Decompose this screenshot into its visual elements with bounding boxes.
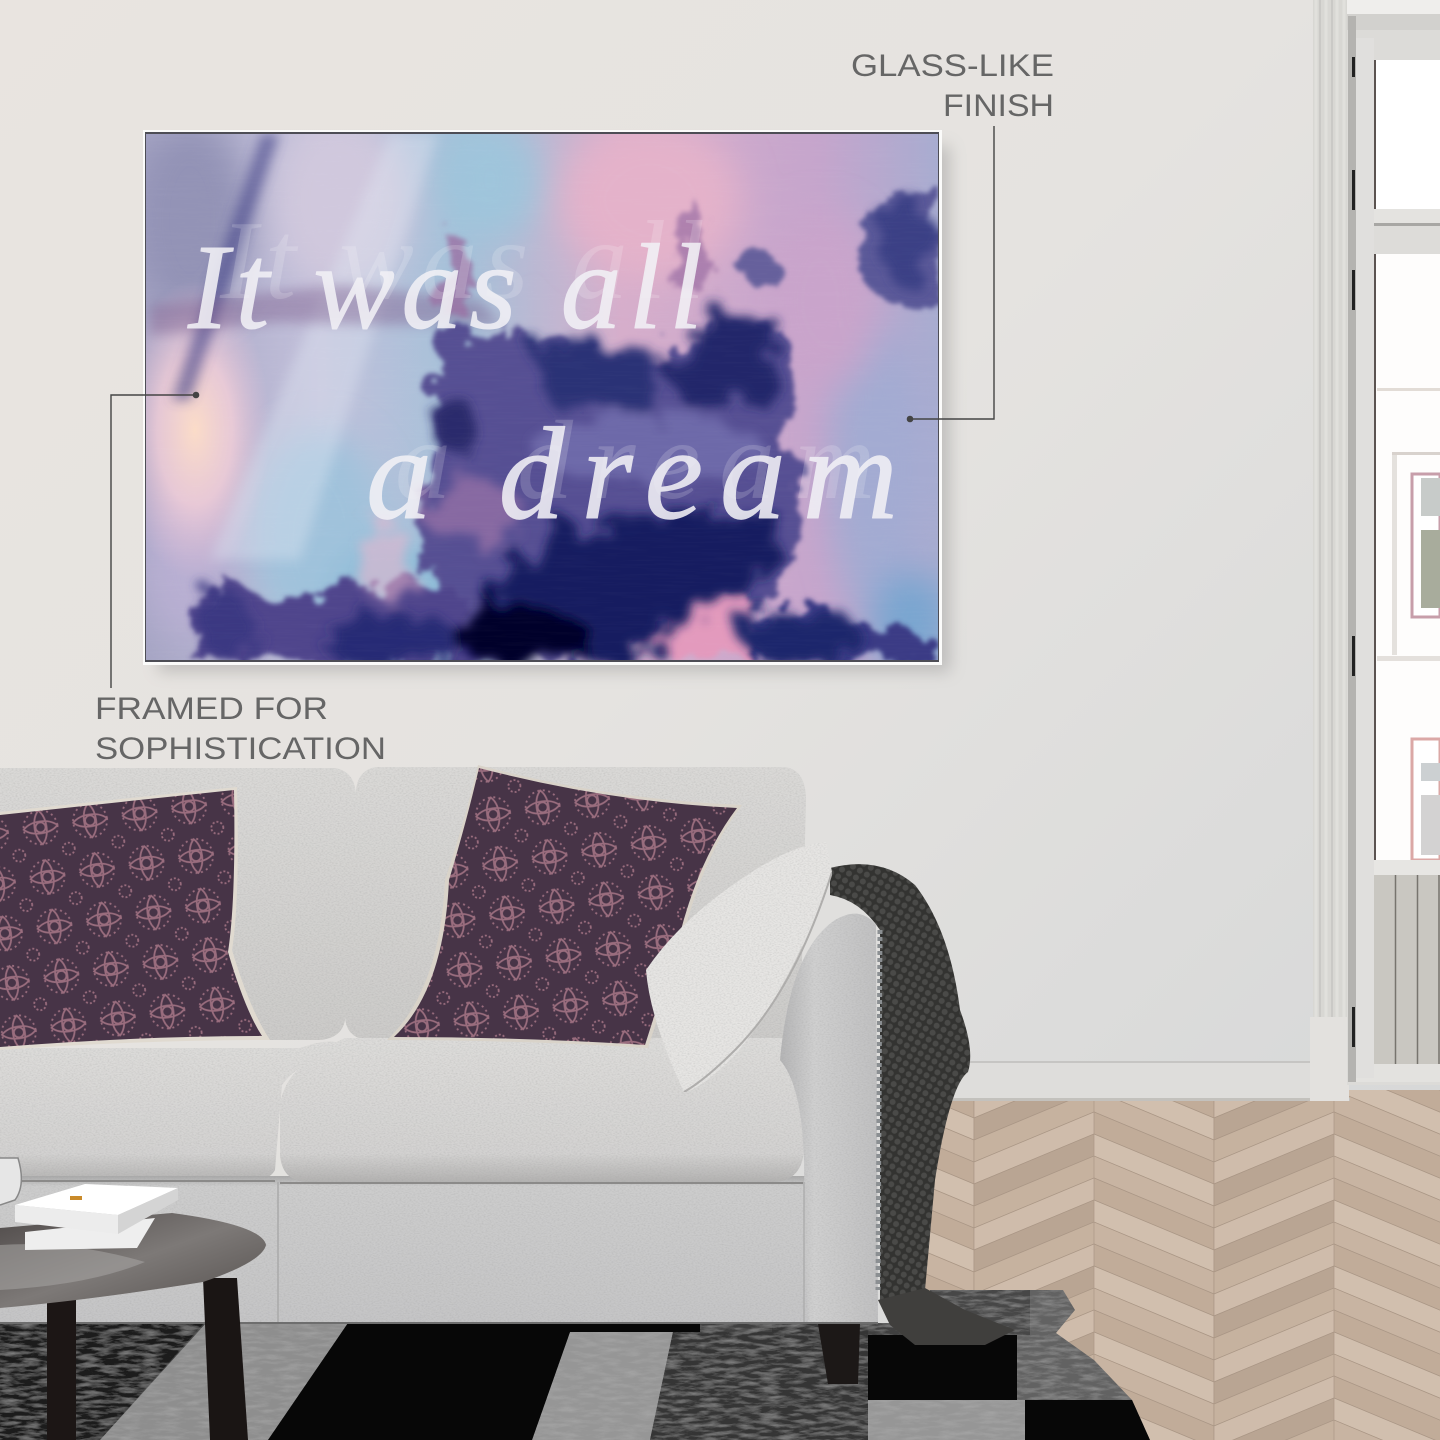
door trim xyxy=(1310,0,1349,1101)
mid clouds xyxy=(192,183,938,660)
base front xyxy=(0,1176,810,1323)
lower pane with building view xyxy=(1374,254,1440,860)
back cushion right xyxy=(345,767,806,1040)
glass xyxy=(0,1158,21,1205)
neon text: It was all xyxy=(187,220,703,355)
neon text: a dream xyxy=(366,400,898,547)
neon text reflection xyxy=(220,220,870,499)
arm xyxy=(780,914,878,1322)
frame xyxy=(143,130,942,665)
neon text reflection: a dream xyxy=(395,399,875,523)
callout line: framed for sophistication xyxy=(111,392,199,688)
throw blanket xyxy=(830,864,1015,1345)
frame shadow xyxy=(158,146,950,672)
seat left xyxy=(0,1041,345,1182)
books xyxy=(15,1184,178,1250)
callout: framed for sophistication: SOPHISTICATION xyxy=(95,730,386,766)
baseboard xyxy=(945,1061,1350,1101)
neon text xyxy=(187,242,893,520)
back cushion left xyxy=(0,768,356,1040)
dark clouds xyxy=(195,195,933,665)
coffee table xyxy=(0,1158,266,1440)
callout: framed for sophistication xyxy=(95,690,386,766)
window bar xyxy=(172,134,279,400)
wood panel xyxy=(1356,860,1440,1082)
callout: glass-like finish xyxy=(851,47,1054,123)
door frame xyxy=(1347,0,1440,1085)
neon text reflection: It was all xyxy=(219,199,705,323)
upper pane xyxy=(1374,60,1440,210)
pillow: white xyxy=(646,842,832,1092)
light ray xyxy=(210,134,438,560)
rug black stripes xyxy=(268,1323,1155,1440)
callout: glass-like finish: FINISH xyxy=(943,87,1054,123)
framed artwork xyxy=(120,110,950,672)
floor xyxy=(900,1090,1440,1440)
seat right xyxy=(280,1038,804,1182)
rug xyxy=(0,1285,1160,1440)
sofa leg xyxy=(818,1324,860,1384)
sofa xyxy=(0,767,878,1384)
callout line: glass-like finish xyxy=(907,126,994,422)
cloud artwork xyxy=(146,134,938,660)
callout: framed for sophistication: FRAMED FOR xyxy=(95,690,328,726)
callout: glass-like finish: GLASS-LIKE xyxy=(851,47,1054,83)
pillow: center damask xyxy=(387,765,742,1048)
pillow: left damask xyxy=(0,787,270,1050)
window and trim xyxy=(1310,0,1440,1101)
